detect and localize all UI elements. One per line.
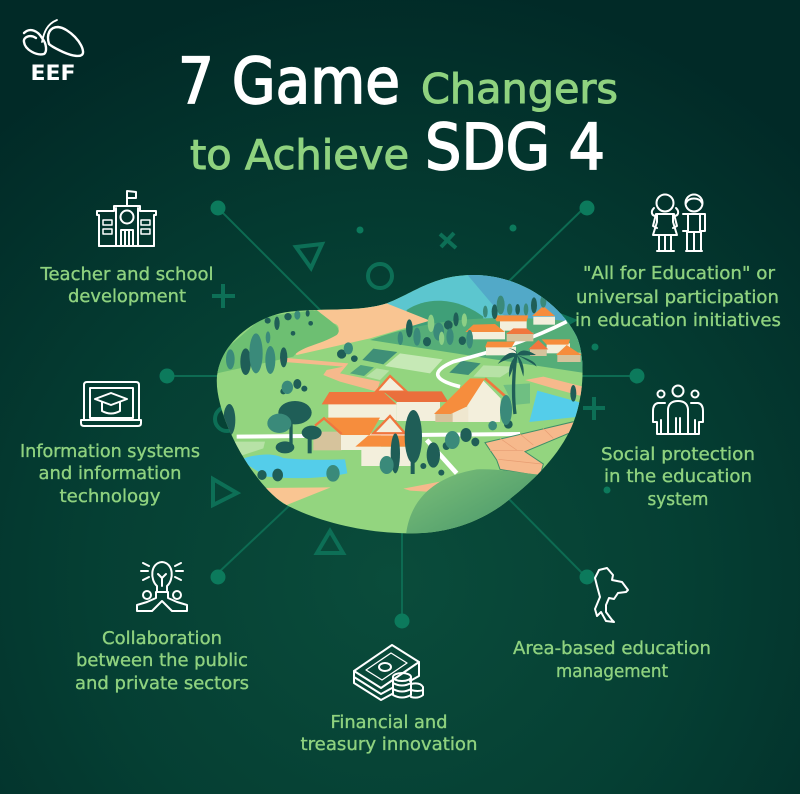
item: public private collaboration: between the public	[76, 651, 248, 671]
item: information systems: technology	[60, 487, 160, 507]
icon: school children	[652, 194, 705, 251]
item: financial and treasury innovation	[300, 645, 478, 755]
item: public private collaboration: Collaboration	[102, 629, 222, 649]
item: social protection: system	[648, 490, 708, 510]
far houses	[500, 319, 527, 331]
bottom right terraces	[485, 421, 575, 476]
left lake	[239, 454, 347, 478]
main houses	[376, 376, 407, 392]
palm tree	[498, 348, 537, 414]
item: public private collaboration	[75, 562, 249, 694]
title: 7 Game	[178, 45, 400, 118]
plots	[362, 349, 397, 364]
item: all for education: universal participation	[576, 288, 779, 308]
illustration: village landscape	[216, 275, 583, 534]
item: financial and treasury innovation: Financial and	[330, 713, 448, 733]
item: social protection: Social protection	[601, 445, 755, 465]
decorative connector lines and shapes	[160, 200, 644, 628]
title: SDG 4	[425, 111, 605, 184]
item: information systems	[20, 382, 200, 507]
foreground hill	[406, 469, 538, 534]
item: social protection	[601, 386, 755, 510]
right terrace	[525, 377, 583, 397]
title	[178, 45, 618, 184]
item: area-based education management: Area-based education	[513, 639, 711, 659]
item: area-based education management: management	[556, 662, 668, 682]
item: all for education	[575, 194, 781, 331]
item: financial and treasury innovation: treasury innovation	[300, 735, 478, 755]
hillside green	[370, 318, 587, 373]
icon: light bulb and people	[137, 562, 187, 611]
item: teacher and school development	[39, 191, 214, 307]
icon: three people	[653, 386, 703, 434]
item: information systems: Information systems	[20, 442, 200, 462]
logo: EEF	[24, 20, 83, 85]
item: all for education: "All for Education" or	[583, 264, 776, 284]
right lake	[529, 391, 583, 422]
item: teacher and school development: Teacher and school	[39, 265, 214, 285]
item: all for education: in education initiatives	[575, 311, 781, 331]
icon: map of Thailand	[595, 568, 628, 622]
item: public private collaboration: and private sectors	[75, 674, 249, 694]
peach field	[295, 303, 430, 355]
title: Changers	[421, 65, 618, 113]
terraces	[280, 357, 380, 392]
sky	[366, 275, 582, 366]
trees	[223, 297, 576, 481]
item: teacher and school development: development	[68, 287, 186, 307]
distant hill	[406, 300, 484, 328]
icon: laptop with graduation cap	[81, 382, 141, 426]
logo: EEF: EEF	[30, 61, 76, 85]
bottom-left pale field	[234, 442, 265, 456]
icon: money stack and coins	[354, 645, 423, 700]
title: to Achieve	[190, 131, 409, 179]
left hill	[213, 310, 339, 373]
icon: school building	[97, 191, 156, 246]
item: area-based education management	[513, 568, 711, 682]
item: social protection: in the education	[604, 467, 752, 487]
item: information systems: and information	[38, 464, 182, 484]
white road	[438, 322, 567, 387]
bottom peach	[260, 487, 331, 505]
